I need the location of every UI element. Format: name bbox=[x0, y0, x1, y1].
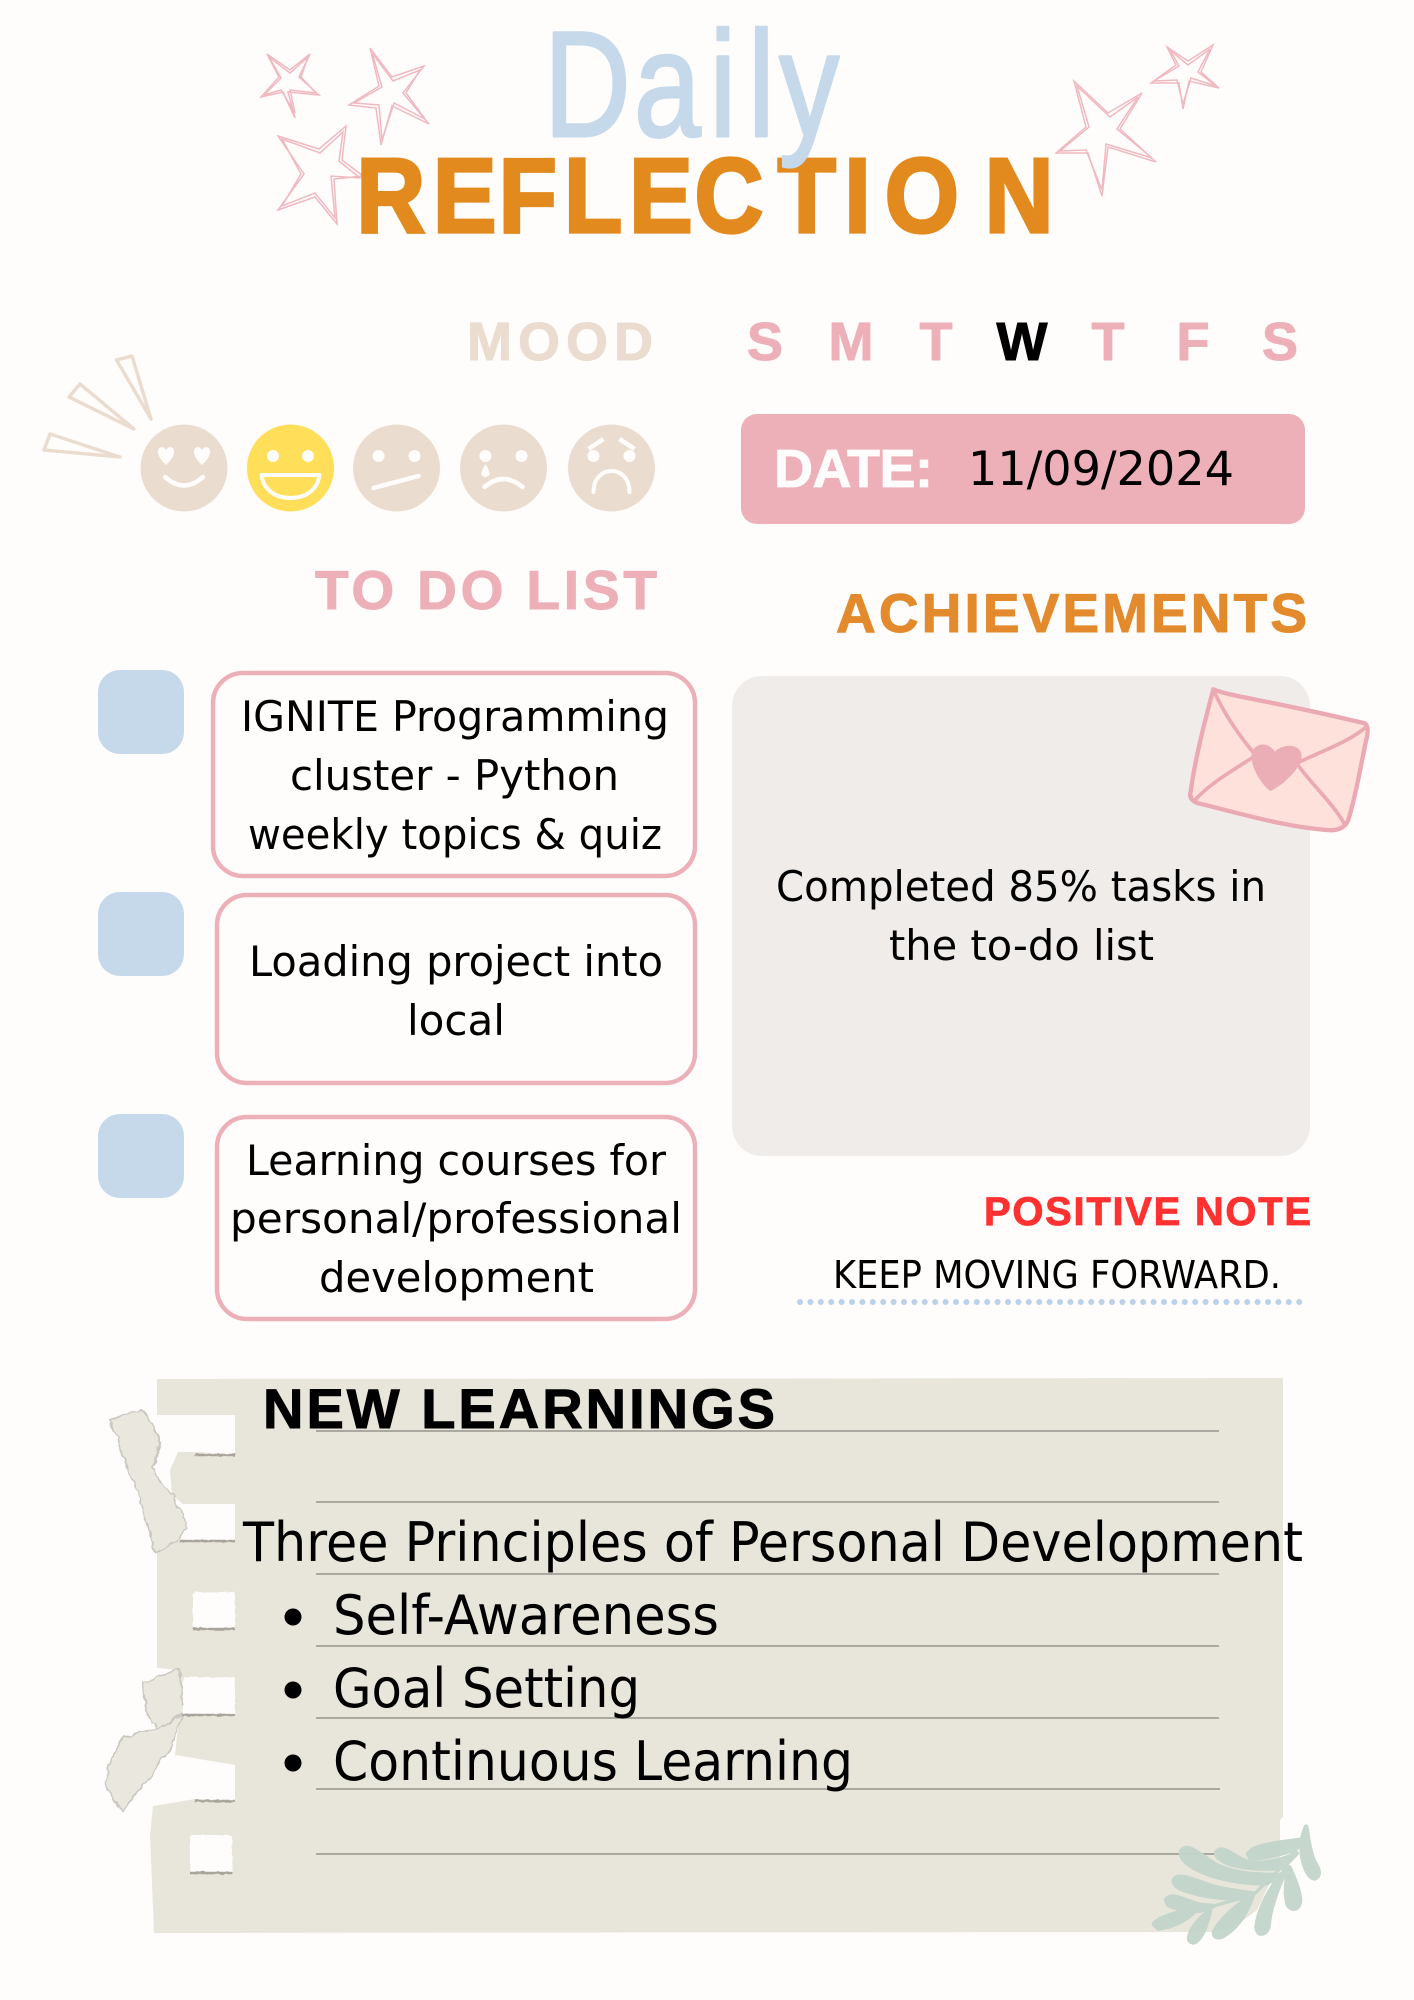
title: REFLECTION: REFLECTION bbox=[356, 137, 1053, 255]
task 3: personal/professional bbox=[230, 1194, 682, 1243]
text: three principles: Three Principles of Personal Development bbox=[242, 1511, 1303, 1574]
decorative stars right of title bbox=[1056, 45, 1219, 196]
panel: torn notebook paper bbox=[107, 1378, 1283, 1933]
task 3 bbox=[217, 1117, 695, 1319]
heading: positive note: POSITIVE NOTE bbox=[984, 1190, 1311, 1234]
decorative stars left of title bbox=[261, 48, 429, 224]
punched holes bbox=[183, 1592, 235, 1873]
hole shadows bbox=[180, 1455, 235, 1873]
ruled lines bbox=[316, 1431, 1220, 1854]
heading: to do list: TO DO LIST bbox=[315, 559, 657, 621]
face: heart eyes bbox=[140, 424, 228, 512]
date bar: 11/09/2024 bbox=[968, 442, 1234, 497]
heading: achievements: ACHIEVEMENTS bbox=[836, 582, 1307, 644]
weekday selector: T bbox=[1092, 312, 1124, 372]
torn flaps bbox=[107, 1410, 187, 1811]
task 1 bbox=[213, 673, 695, 876]
task 2: local bbox=[407, 996, 505, 1045]
task 2: Loading project into bbox=[249, 937, 663, 986]
task 3: development bbox=[319, 1253, 594, 1302]
weekday selector: S bbox=[1262, 312, 1298, 372]
weekday selector: S bbox=[747, 312, 783, 372]
icon: love letter envelope bbox=[1190, 689, 1368, 830]
bullet list: Goal Setting bbox=[333, 1657, 640, 1720]
face: unsure bbox=[353, 424, 440, 512]
dotted underline bbox=[800, 1299, 1302, 1305]
face: upset bbox=[568, 424, 655, 512]
heading: new learnings: NEW LEARNINGS bbox=[263, 1377, 775, 1440]
bullet list: Self-Awareness bbox=[333, 1584, 719, 1647]
date bar: DATE: bbox=[774, 439, 933, 499]
task 3: Learning courses for bbox=[246, 1136, 667, 1185]
face: big smile (selected) bbox=[247, 424, 334, 512]
task 1: weekly topics & quiz bbox=[248, 810, 662, 859]
date bar bbox=[741, 414, 1305, 524]
bullet list: Continuous Learning bbox=[333, 1730, 853, 1793]
task 1: cluster - Python bbox=[290, 751, 619, 800]
task 2 bbox=[217, 895, 695, 1083]
face: sad with tear bbox=[460, 424, 547, 512]
weekday selector: T bbox=[920, 312, 952, 372]
text: keep moving forward: KEEP MOVING FORWARD. bbox=[833, 1253, 1281, 1297]
icon: leaf sprig bbox=[1154, 1827, 1319, 1942]
panel: achievements bbox=[732, 676, 1310, 1156]
bullet list bbox=[284, 1584, 853, 1793]
checkbox 1 bbox=[98, 670, 184, 754]
weekday selector: M bbox=[829, 312, 873, 372]
task 1: IGNITE Programming bbox=[241, 692, 669, 741]
weekday selector: F bbox=[1176, 312, 1210, 372]
title: Daily: Daily bbox=[544, 0, 839, 168]
weekday selector: W bbox=[997, 312, 1048, 372]
panel: achievements: Completed 85% tasks in bbox=[776, 862, 1266, 911]
weekday selector bbox=[747, 312, 1298, 372]
checkbox 2 bbox=[98, 892, 184, 976]
mood faces bbox=[140, 424, 655, 512]
checkbox 3 bbox=[98, 1114, 184, 1198]
heading: mood: MOOD bbox=[467, 312, 653, 372]
burst lines by mood faces bbox=[44, 356, 151, 457]
panel: achievements: the to-do list bbox=[889, 921, 1154, 970]
